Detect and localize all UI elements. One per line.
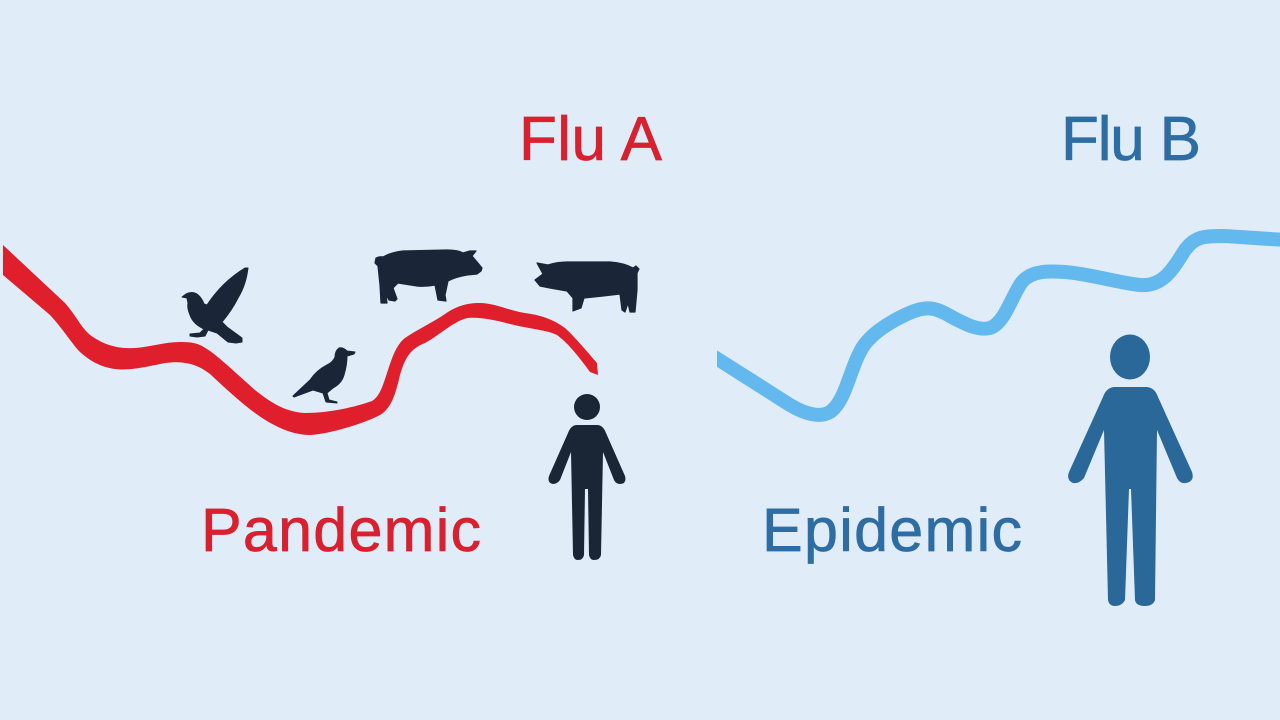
icon: small dark person	[548, 394, 625, 560]
heading: Flu B: Flu B	[1061, 105, 1201, 174]
icon: large blue person	[1068, 334, 1193, 606]
red transmission ribbon	[3, 245, 598, 435]
label: Pandemic: Pandemic	[201, 496, 481, 564]
icon: perched bird	[293, 348, 355, 403]
heading: Flu A: Flu A	[519, 105, 663, 174]
icon: pig facing left	[535, 262, 639, 312]
infographic: Flu A versus Flu B	[3, 114, 1280, 606]
blue transmission line	[705, 236, 1280, 415]
icon: pig facing right	[375, 250, 482, 303]
label: Epidemic: Epidemic	[762, 496, 1022, 564]
icon: bird with raised wing	[182, 268, 248, 343]
